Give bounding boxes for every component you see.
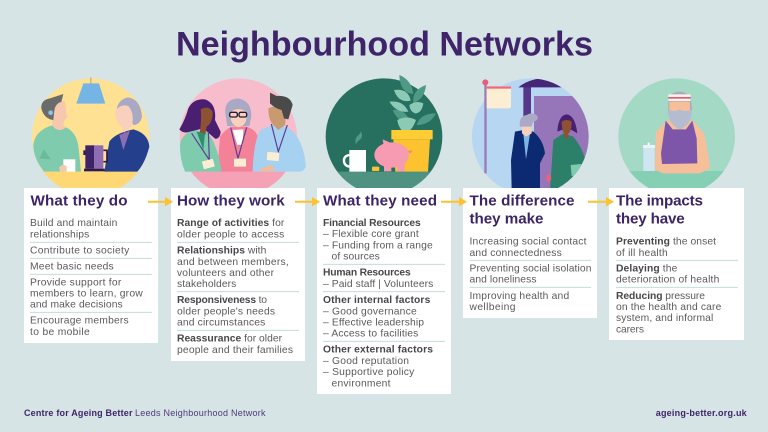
list: the difference items: and connectedness [470, 248, 562, 259]
list: how they work items: older people to access [177, 230, 284, 240]
list: what they do items: relationships [30, 230, 89, 240]
list: the impacts items [616, 236, 738, 336]
list: the difference items: wellbeing [468, 302, 516, 313]
list: what they need items: – Supportive policy [323, 367, 415, 378]
list: the impacts items: carers [616, 324, 644, 336]
list: the difference items: Increasing social contact [470, 236, 587, 248]
list: the impacts items: Delaying the [616, 264, 678, 274]
list: what they do items: Contribute to society [30, 246, 130, 256]
illustration: two women at a bus stop [472, 78, 591, 195]
list: the impacts items: Preventing the onset [616, 236, 716, 248]
list: what they need items: – Access to facilities [323, 328, 418, 340]
illustration: two people talking over a kettle [32, 77, 150, 188]
heading: how they work: How they work [177, 192, 285, 210]
list: the impacts items: on the health and care [616, 302, 722, 313]
list: what they need items: Other external factors [323, 344, 433, 356]
panel: the impacts they have [609, 188, 744, 340]
list: what they do items: to be mobile [30, 327, 90, 338]
list: what they need items: Other internal factors [323, 295, 431, 306]
illustration: mug, piggy bank and plant [326, 75, 442, 188]
list: what they need items: – Paid staff | Volunteers [323, 279, 433, 290]
panel: the difference they make [463, 188, 597, 318]
title: Neighbourhood Networks [176, 26, 593, 64]
list: what they need items: – Effective leadership [323, 318, 424, 328]
list: the difference items: Improving health and [470, 291, 569, 302]
illustration: older man with headband and water bottle [618, 78, 735, 188]
list: how they work items: Reassurance for older [177, 334, 283, 344]
list: what they do items: and make decisions [30, 300, 123, 310]
list: what they do items [30, 218, 152, 338]
list: the impacts items: system, and informal [616, 313, 713, 324]
list: how they work items [177, 218, 299, 356]
arrow: work to need [295, 197, 320, 206]
list: how they work items: and circumstances [177, 318, 265, 328]
list: what they need items [323, 218, 445, 390]
panel: what they do [24, 188, 158, 343]
arrow: difference to impacts [588, 197, 614, 206]
list: what they do items: Encourage members [30, 316, 129, 326]
list: the difference items [468, 236, 592, 313]
list: how they work items: Responsiveness to [177, 295, 267, 306]
list: the impacts items: of ill health [616, 248, 668, 259]
heading: the difference they make: they make [470, 210, 544, 228]
heading: what they need: What they need [323, 192, 437, 210]
list: how they work items: and between members, [177, 257, 289, 268]
list: how they work items: Relationships with [177, 246, 267, 256]
list: the impacts items: deterioration of health [616, 274, 720, 286]
list: what they do items: Meet basic needs [30, 262, 114, 272]
list: how they work items: stakeholders [177, 279, 236, 290]
list: what they do items: members to learn, grow [30, 288, 143, 300]
list: what they need items: – Funding from a range [323, 240, 433, 252]
heading: the difference they make [470, 192, 574, 228]
list: what they do items: Provide support for [30, 278, 122, 288]
heading: the difference they make: The difference [470, 192, 574, 210]
list: how they work items: people and their families [177, 345, 293, 356]
list: how they work items: Range of activities for [177, 218, 285, 229]
list: what they need items: – Flexible core grant [323, 229, 419, 240]
list: how they work items: older people's needs [177, 306, 275, 318]
list: what they need items: of sources [332, 252, 380, 262]
illustration: three people with lanyards [177, 78, 306, 198]
list: what they do items: Build and maintain [30, 218, 118, 229]
arrow: need to difference [441, 197, 467, 206]
list: how they work items: volunteers and other [177, 268, 275, 279]
heading: what they do: What they do [30, 192, 128, 210]
panel: how they work [171, 188, 305, 361]
footer: organisation: Centre for Ageing Better [24, 408, 133, 418]
panel: what they need [317, 188, 451, 394]
arrow: do to work [148, 197, 173, 206]
heading: the impacts they have: they have [616, 210, 685, 228]
list: the difference items: Preventing social isolation [470, 264, 592, 274]
heading: the impacts they have: The impacts [616, 192, 703, 210]
footer: network name: Leeds Neighbourhood Network [135, 408, 266, 418]
footer: website: ageing-better.org.uk [656, 408, 748, 418]
list: the impacts items: Reducing pressure [616, 291, 705, 302]
list: what they need items: environment [332, 378, 391, 390]
list: what they need items: – Good reputation [323, 356, 409, 367]
list: the difference items: and loneliness [470, 274, 536, 286]
heading: the impacts they have [616, 192, 703, 228]
list: what they need items: Financial Resources [323, 218, 421, 229]
list: what they need items: Human Resources [323, 268, 411, 278]
list: what they need items: – Good governance [323, 306, 417, 318]
